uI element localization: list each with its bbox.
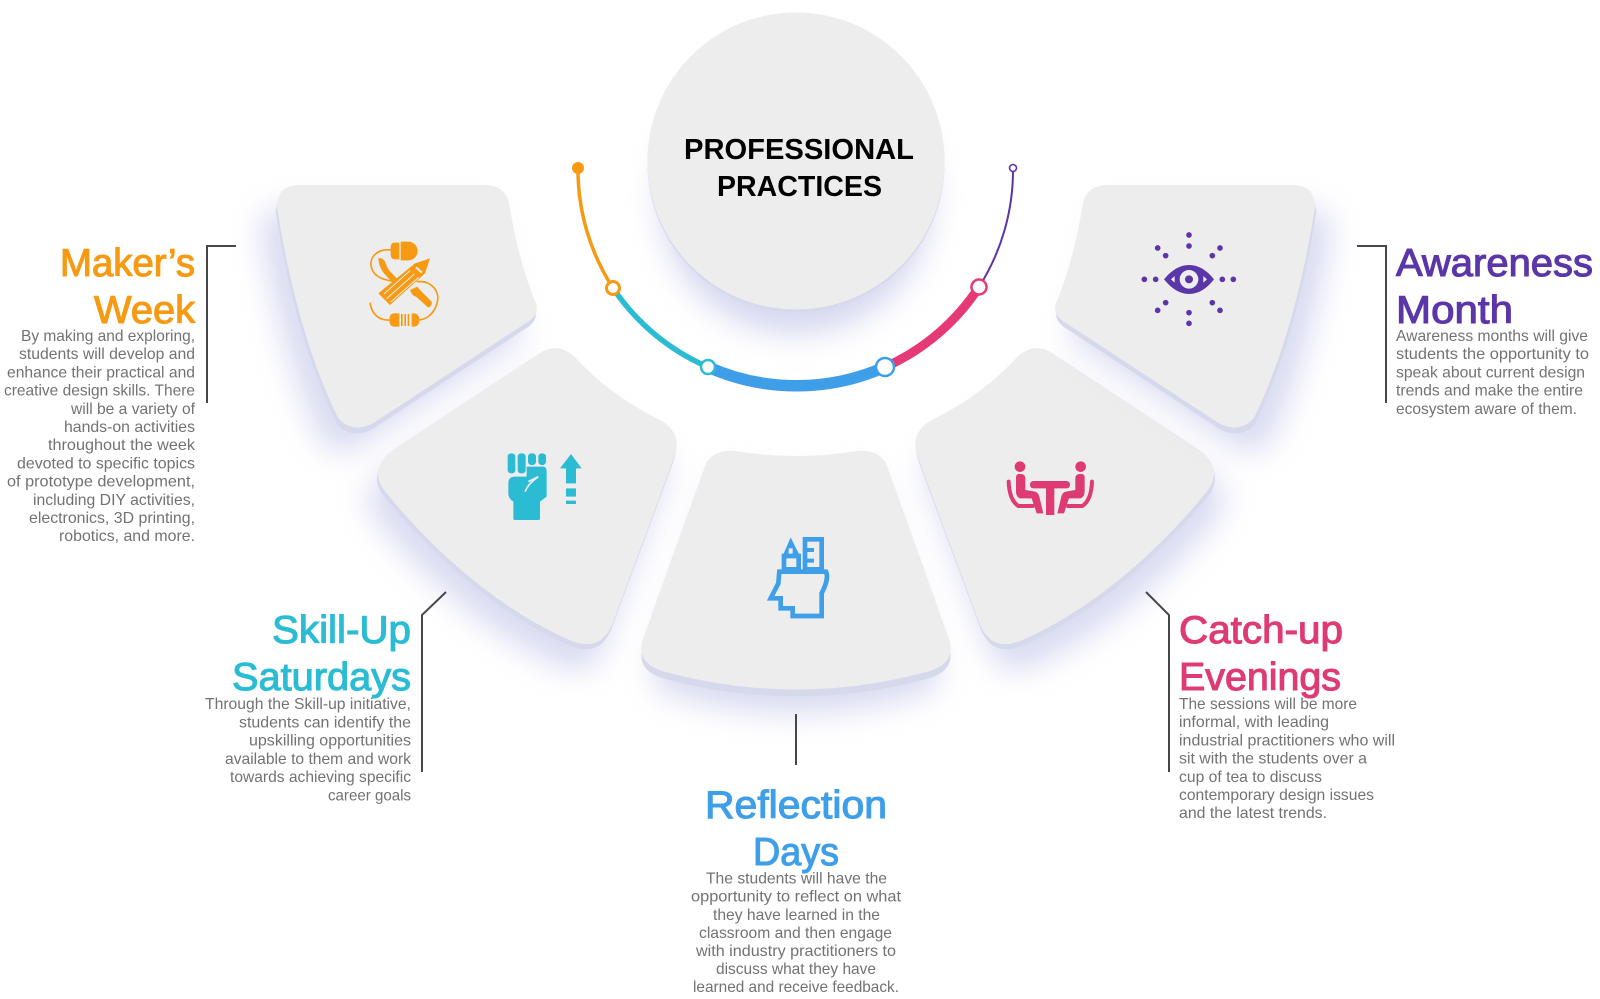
panel: Awareness Month — [1055, 185, 1331, 452]
text block: Catch-up Evenings: contemporary design issues — [1179, 787, 1374, 804]
text block: Maker's Week — [4, 242, 196, 545]
text block: Catch-up Evenings: The sessions will be more — [1179, 696, 1357, 713]
title — [684, 134, 914, 203]
text block: Catch-up Evenings: sit with the students over a — [1179, 751, 1367, 768]
connector: Catch-up Evenings — [1146, 592, 1169, 772]
text block: Skill-Up Saturdays: career goals — [328, 788, 411, 804]
icon: head with pencil and ruler — [771, 537, 827, 616]
connector: Maker's Week — [207, 246, 236, 403]
text block: Reflection Days: discuss what they have — [716, 961, 876, 978]
text block: Catch-up Evenings: Catch-up — [1179, 609, 1343, 652]
connector: Skill-Up Saturdays — [422, 592, 446, 772]
text block: Maker's Week: robotics, and more. — [59, 528, 195, 545]
title: PROFESSIONAL — [684, 134, 914, 166]
text block: Reflection Days: with industry practitioners to — [695, 943, 896, 960]
text block: Awareness Month: trends and make the entire — [1396, 383, 1583, 400]
text block: Skill-Up Saturdays: towards achieving specific — [230, 769, 411, 786]
text block: Catch-up Evenings: cup of tea to discuss — [1179, 769, 1322, 786]
connector: Reflection Days — [795, 714, 797, 765]
text block: Reflection Days: The students will have the — [706, 870, 887, 888]
text block: Awareness Month — [1396, 242, 1593, 418]
text block: Maker's Week: creative design skills. There — [4, 383, 195, 400]
text block: Reflection Days: Days — [753, 831, 839, 874]
text block: Maker's Week: including DIY activities, — [33, 492, 195, 509]
text block: Catch-up Evenings: Evenings — [1179, 656, 1341, 699]
text block: Maker's Week: enhance their practical and — [7, 364, 195, 381]
text block: Catch-up Evenings: informal, with leading — [1179, 714, 1329, 731]
text block: Skill-Up Saturdays: upskilling opportunities — [249, 733, 411, 750]
icon: raised fist with up arrow — [508, 453, 582, 520]
text block: Reflection Days: classroom and then engage — [699, 925, 892, 942]
text block: Maker's Week: hands-on activities — [64, 419, 195, 436]
text block: Maker's Week: Maker’s — [60, 242, 195, 285]
text block: Maker's Week: electronics, 3D printing, — [29, 510, 195, 527]
connector: Awareness Month — [1357, 246, 1386, 403]
text block: Reflection Days: Reflection — [705, 784, 887, 827]
text block: Awareness Month: Month — [1396, 289, 1513, 332]
text block: Reflection Days: opportunity to reflect on what — [691, 889, 902, 906]
text block: Maker's Week: By making and exploring, — [21, 328, 195, 345]
text block: Catch-up Evenings — [1179, 609, 1395, 822]
text block: Maker's Week: will be a variety of — [70, 401, 196, 418]
text block: Skill-Up Saturdays: Saturdays — [232, 656, 411, 699]
icon: eye with radiating dots — [1141, 232, 1236, 326]
panel: Skill-Up Saturdays — [368, 348, 677, 670]
text block: Reflection Days: they have learned in the — [713, 907, 880, 924]
panel: Catch-up Evenings — [915, 348, 1224, 670]
text block: Maker's Week: devoted to specific topics — [17, 455, 195, 472]
icon: pencil, screwdriver, mouse and plug — [370, 242, 438, 327]
text block: Awareness Month: Awareness months will give — [1396, 328, 1588, 345]
text block: Catch-up Evenings: and the latest trends. — [1179, 805, 1327, 822]
text block: Reflection Days: learned and receive feedback. — [693, 979, 899, 996]
text block: Reflection Days — [691, 784, 902, 996]
text block: Skill-Up Saturdays: Through the Skill-up initiative, — [205, 696, 411, 713]
icon: two people at a table — [1009, 461, 1092, 515]
text block: Skill-Up Saturdays — [205, 609, 412, 804]
text block: Catch-up Evenings: industrial practitioners who will — [1179, 732, 1395, 749]
panel: Maker's Week — [261, 185, 537, 452]
text block: Skill-Up Saturdays: Skill-Up — [272, 609, 411, 652]
text block: Maker's Week: students will develop and — [19, 346, 195, 363]
text block: Awareness Month: speak about current design — [1396, 364, 1585, 381]
text block: Awareness Month: students the opportunity to — [1396, 346, 1589, 363]
text block: Maker's Week: throughout the week — [48, 437, 196, 454]
text block: Maker's Week: Week — [94, 289, 195, 332]
text block: Awareness Month: ecosystem aware of them. — [1396, 401, 1577, 418]
title: PRACTICES — [717, 171, 882, 203]
panel: Reflection Days — [641, 451, 951, 714]
text block: Skill-Up Saturdays: available to them and work — [225, 751, 412, 768]
semicircular timeline arc — [572, 162, 1016, 386]
central circle — [648, 12, 944, 334]
text block: Awareness Month: Awareness — [1396, 242, 1593, 285]
text block: Maker's Week: of prototype development, — [7, 474, 195, 491]
text block: Skill-Up Saturdays: students can identify the — [239, 714, 411, 731]
